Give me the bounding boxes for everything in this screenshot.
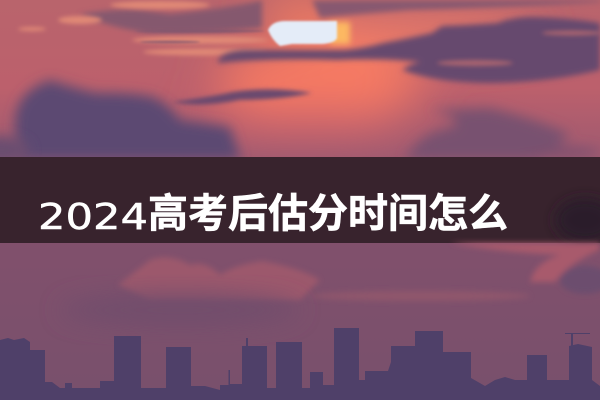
lower-left sky shade bbox=[0, 136, 30, 164]
dark clouds at top bbox=[80, 0, 600, 33]
dark streaks by the sun bbox=[135, 30, 265, 43]
title text bbox=[38, 192, 508, 238]
large dark cloud left bbox=[15, 80, 241, 160]
title chinese: 高考后估分时间怎么 bbox=[148, 192, 508, 236]
sun halo bbox=[330, 22, 350, 44]
dark cloud right of sun bbox=[218, 17, 600, 83]
antenna bbox=[228, 338, 248, 390]
title digits: 2024 bbox=[38, 197, 148, 238]
title band bbox=[0, 157, 600, 243]
sun disc bbox=[268, 21, 337, 46]
light streaked clouds upper left bbox=[18, 1, 268, 56]
tower crane right bbox=[565, 333, 590, 346]
pink clouds right bbox=[450, 243, 600, 294]
pale highlights in right cloud bbox=[437, 30, 600, 66]
title band dark patch bbox=[555, 198, 600, 242]
orange glow around sun bbox=[190, 0, 540, 136]
city skyline bbox=[0, 328, 600, 400]
dim clouds lower right bbox=[405, 108, 600, 160]
lower cloud shade bbox=[60, 294, 300, 326]
small dark cloud centre bbox=[172, 89, 312, 105]
pink clouds lower sky bbox=[118, 257, 530, 301]
sun bbox=[268, 21, 350, 46]
